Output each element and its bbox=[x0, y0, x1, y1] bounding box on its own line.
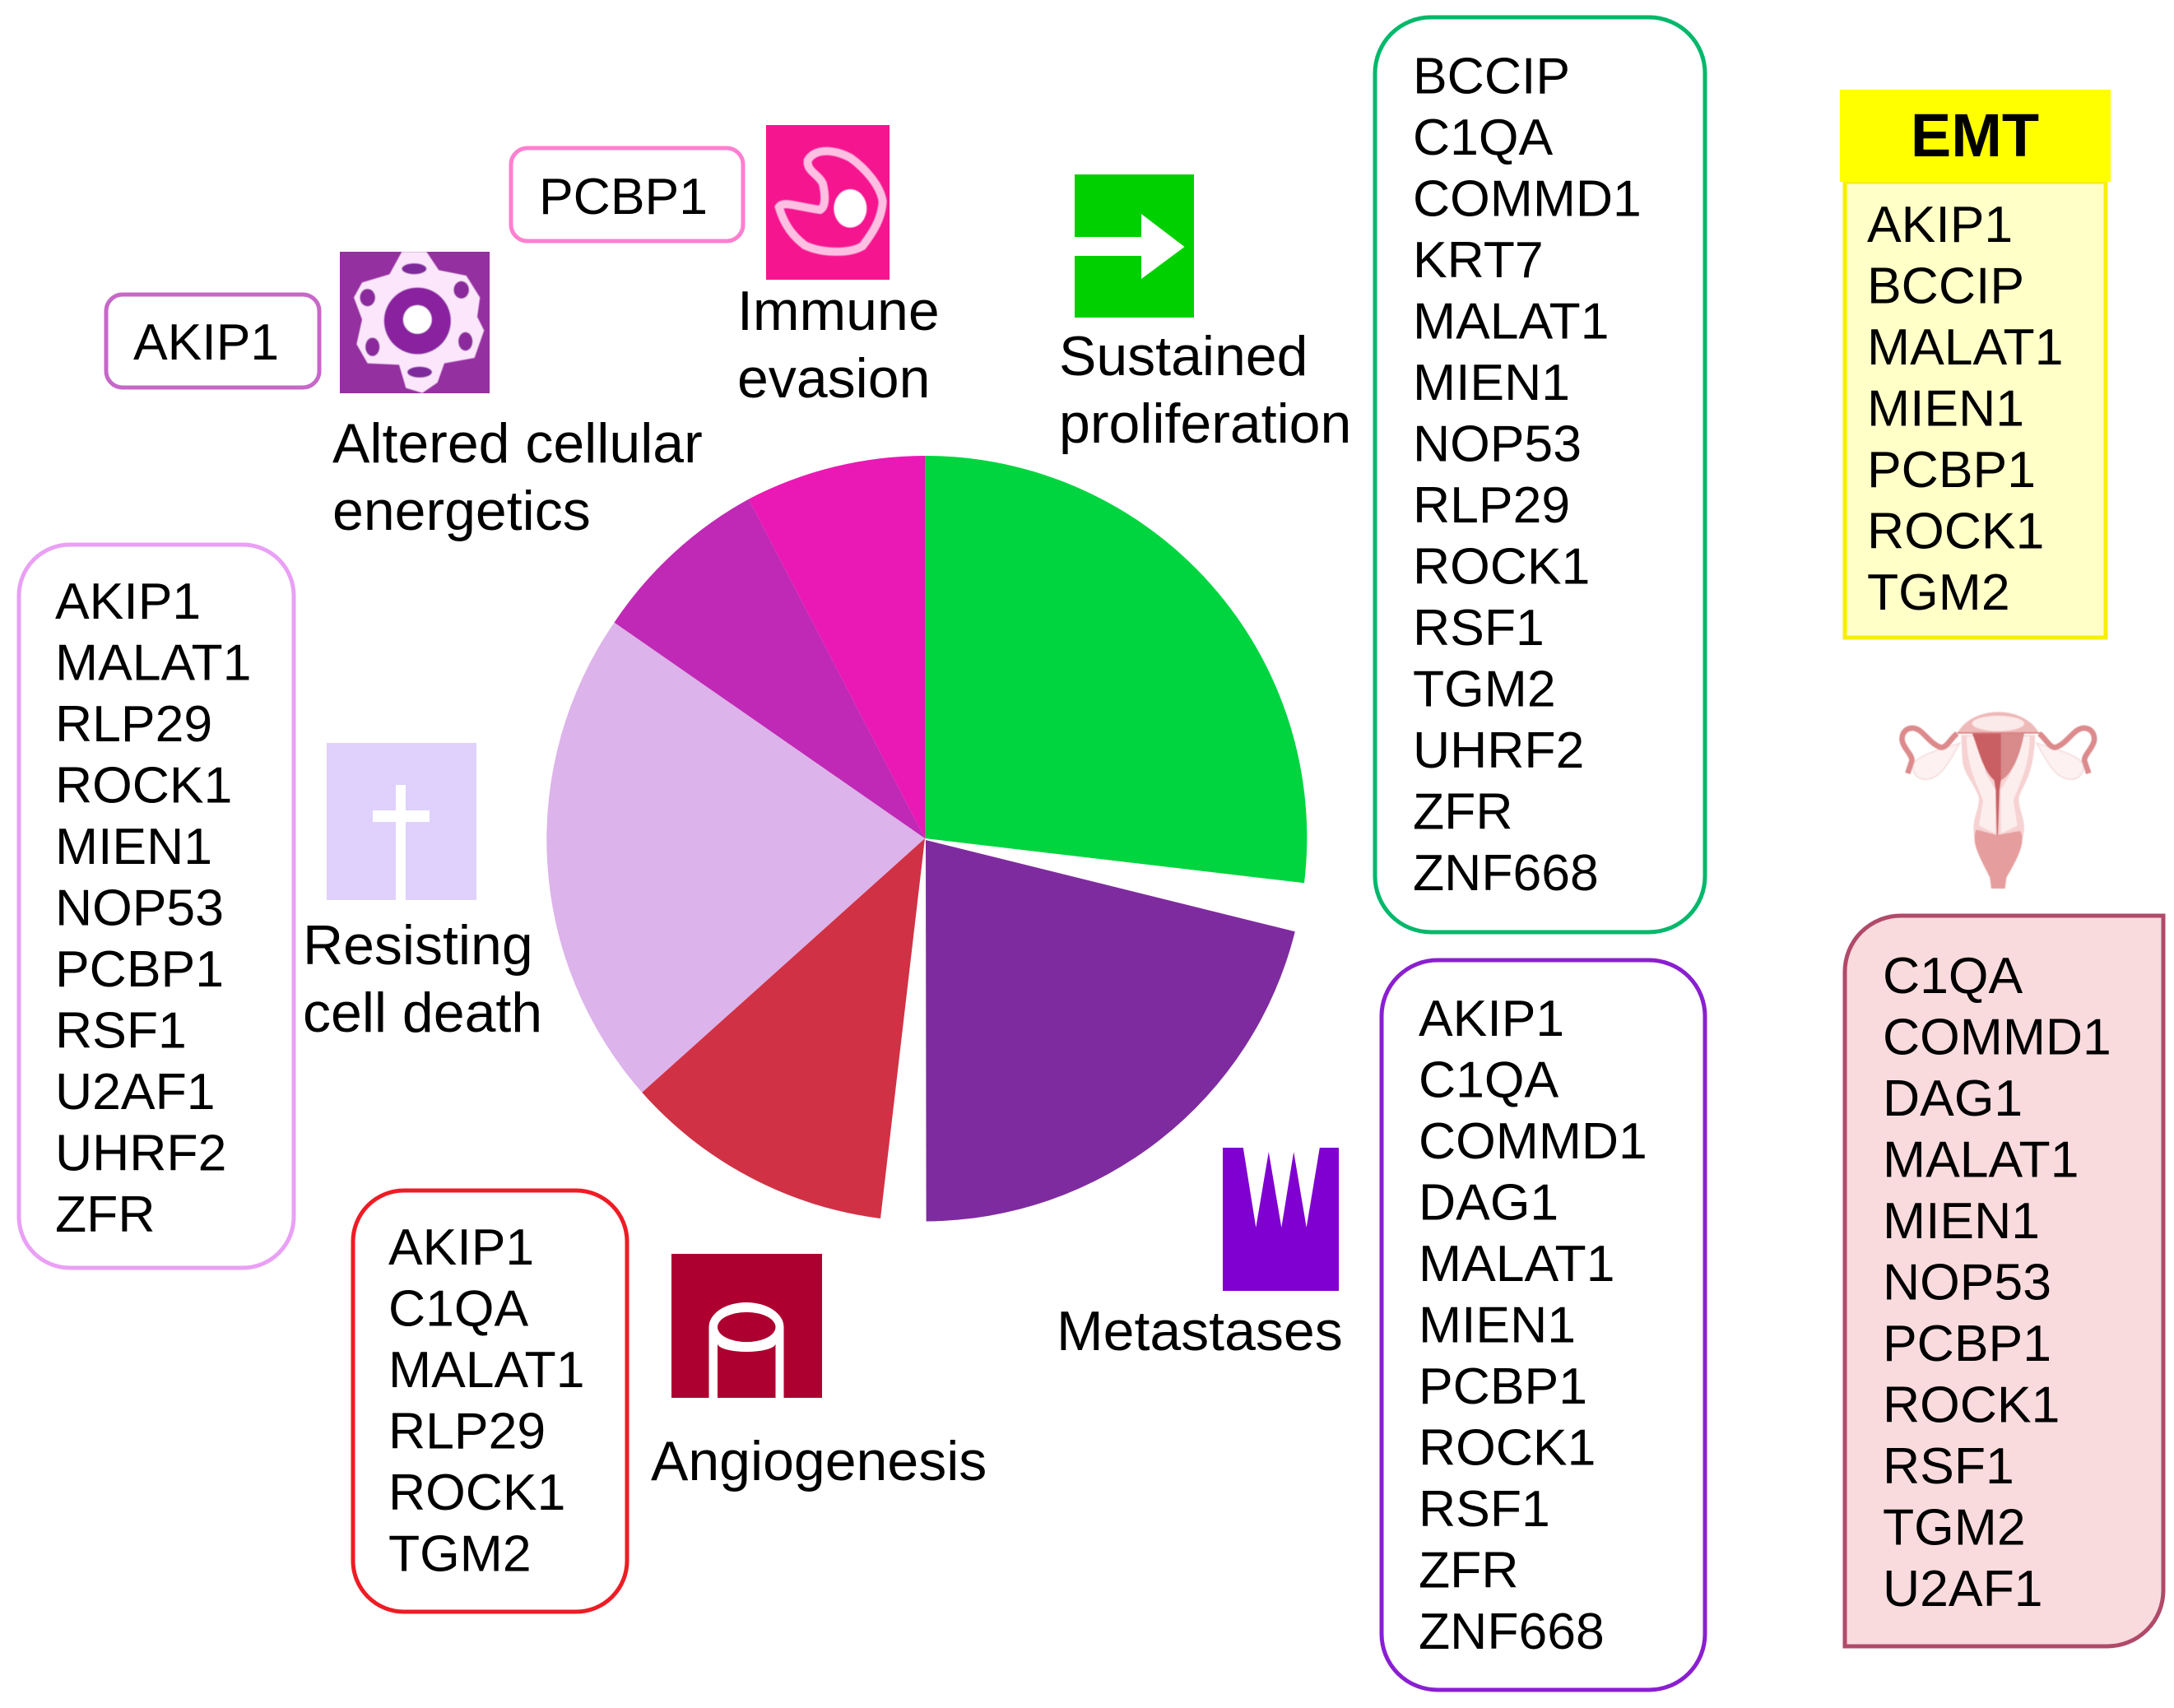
panel: cervical/uterine genes: COMMD1 bbox=[1883, 1009, 2111, 1066]
pie slice: angiogenesis bbox=[642, 838, 925, 1218]
EMT header band bbox=[1840, 90, 2111, 182]
panel: resisting cell death genes: NOP53 bbox=[55, 879, 224, 936]
pie slice: sustained proliferation bbox=[925, 456, 1307, 883]
icon: uterus bbox=[1902, 712, 2094, 889]
label: metastases: Metastases bbox=[1057, 1300, 1343, 1362]
panel: metastases genes: C1QA bbox=[1419, 1051, 1559, 1109]
label: altered cellular energetics: energetics bbox=[332, 480, 591, 542]
panel: resisting cell death genes bbox=[19, 545, 294, 1268]
label: resisting cell death: Resisting bbox=[303, 914, 533, 977]
panel: sustained proliferation genes bbox=[1375, 17, 1705, 932]
panel: metastases genes: ROCK1 bbox=[1419, 1418, 1596, 1476]
dome highlight bbox=[1972, 716, 2024, 731]
panel: resisting cell death genes: RSF1 bbox=[55, 1002, 187, 1060]
pie slice: immune evasion bbox=[749, 456, 925, 838]
label: altered cellular energetics: Altered cellular bbox=[332, 412, 703, 475]
panel: angiogenesis genes: C1QA bbox=[388, 1280, 529, 1338]
panel: sustained proliferation genes: RSF1 bbox=[1413, 599, 1545, 657]
label: sustained proliferation: Sustained bbox=[1059, 325, 1308, 388]
panel: resisting cell death genes: PCBP1 bbox=[55, 940, 224, 998]
fallopian tubes bbox=[1902, 728, 1957, 773]
panel: sustained proliferation genes: TGM2 bbox=[1413, 660, 1556, 717]
panel: sustained proliferation genes: RLP29 bbox=[1413, 476, 1570, 534]
EMT gene list: MIEN1 bbox=[1867, 380, 2024, 438]
EMT gene list: TGM2 bbox=[1867, 564, 2010, 621]
EMT gene list: MALAT1 bbox=[1867, 318, 2064, 376]
icon: altered cellular energetics atom bbox=[340, 252, 490, 393]
panel: cervical/uterine genes: PCBP1 bbox=[1883, 1315, 2051, 1372]
panel: angiogenesis genes bbox=[353, 1190, 627, 1612]
panel: sustained proliferation genes: NOP53 bbox=[1413, 415, 1582, 472]
panel: metastases genes: ZNF668 bbox=[1419, 1603, 1605, 1660]
uterine cavity bbox=[1972, 733, 2024, 837]
panel: angiogenesis genes: ROCK1 bbox=[388, 1464, 565, 1521]
icon: angiogenesis vessel bbox=[671, 1254, 822, 1398]
panel: cervical/uterine genes: TGM2 bbox=[1883, 1499, 2026, 1557]
panel: energetics gene AKIP1: AKIP1 bbox=[133, 313, 279, 371]
panel: angiogenesis genes: TGM2 bbox=[388, 1525, 532, 1583]
panel: resisting cell death genes: AKIP1 bbox=[55, 573, 201, 630]
EMT gene list: BCCIP bbox=[1867, 257, 2024, 314]
panel: resisting cell death genes: MALAT1 bbox=[55, 634, 252, 691]
panel: cervical/uterine genes: MIEN1 bbox=[1883, 1192, 2040, 1250]
panel: metastases genes: DAG1 bbox=[1419, 1173, 1558, 1231]
EMT gene list: PCBP1 bbox=[1867, 441, 2036, 499]
panel: sustained proliferation genes: C1QA bbox=[1413, 109, 1554, 166]
icon: immune evasion bbox=[766, 125, 890, 280]
panel: sustained proliferation genes: ZFR bbox=[1413, 783, 1512, 841]
panel: resisting cell death genes: ROCK1 bbox=[55, 757, 232, 815]
panel: immune evasion gene PCBP1 bbox=[511, 148, 743, 241]
panel: cervical/uterine genes bbox=[1845, 916, 2163, 1646]
panel: resisting cell death genes: U2AF1 bbox=[55, 1063, 216, 1121]
panel: metastases genes: RSF1 bbox=[1419, 1480, 1550, 1538]
label: immune evasion: Immune bbox=[737, 280, 940, 342]
pie chart bbox=[546, 456, 1307, 1221]
panel: EMT genes bbox=[1840, 90, 2111, 638]
panel: metastases genes: COMMD1 bbox=[1419, 1112, 1647, 1170]
icon: sustained proliferation arrow bbox=[1075, 174, 1194, 318]
panel: sustained proliferation genes: ROCK1 bbox=[1413, 538, 1590, 596]
panel: cervical/uterine genes: MALAT1 bbox=[1883, 1130, 2079, 1188]
pie slice: altered cellular energetics bbox=[614, 499, 925, 838]
EMT heading: EMT bbox=[1911, 101, 2039, 169]
panel: resisting cell death genes: MIEN1 bbox=[55, 818, 212, 875]
panel: resisting cell death genes: ZFR bbox=[55, 1186, 155, 1243]
panel: angiogenesis genes: RLP29 bbox=[388, 1402, 546, 1460]
ovaries bbox=[1913, 743, 2083, 779]
panel: sustained proliferation genes: BCCIP bbox=[1413, 48, 1570, 105]
uterus body bbox=[1961, 735, 2035, 889]
panel: sustained proliferation genes: KRT7 bbox=[1413, 231, 1544, 289]
label: angiogenesis: Angiogenesis bbox=[651, 1430, 987, 1492]
panel: resisting cell death genes: RLP29 bbox=[55, 695, 212, 753]
vaginal canal bbox=[1975, 829, 2023, 889]
panel: cervical/uterine genes: DAG1 bbox=[1883, 1070, 2023, 1127]
panel: metastases genes: AKIP1 bbox=[1419, 990, 1564, 1047]
cavity light half bbox=[2001, 733, 2024, 780]
uterine dome bbox=[1957, 712, 2039, 734]
icon: metastases bbox=[1223, 1148, 1339, 1291]
panel: cervical/uterine genes: NOP53 bbox=[1883, 1254, 2051, 1311]
panel: immune evasion gene PCBP1: PCBP1 bbox=[539, 168, 708, 225]
panel: metastases genes: MIEN1 bbox=[1419, 1297, 1576, 1354]
icon: resisting cell death cross bbox=[327, 743, 476, 900]
pie slice: resisting cell death bbox=[546, 623, 925, 1093]
panel: cervical/uterine genes: ROCK1 bbox=[1883, 1376, 2060, 1433]
panel: metastases genes bbox=[1382, 960, 1705, 1690]
EMT gene list: AKIP1 bbox=[1867, 196, 2013, 253]
panel: sustained proliferation genes: ZNF668 bbox=[1413, 844, 1599, 902]
pie slice: metastases bbox=[926, 840, 1295, 1221]
EMT gene list: ROCK1 bbox=[1867, 502, 2044, 559]
panel: metastases genes: PCBP1 bbox=[1419, 1358, 1587, 1415]
panel: cervical/uterine genes: U2AF1 bbox=[1883, 1560, 2043, 1617]
panel: cervical/uterine genes: C1QA bbox=[1883, 947, 2023, 1005]
panel: angiogenesis genes: AKIP1 bbox=[388, 1218, 534, 1276]
dome base line bbox=[1957, 732, 2041, 734]
panel: sustained proliferation genes: UHRF2 bbox=[1413, 722, 1584, 779]
panel: metastases genes: ZFR bbox=[1419, 1542, 1519, 1599]
panel: sustained proliferation genes: COMMD1 bbox=[1413, 169, 1642, 227]
panel: angiogenesis genes: MALAT1 bbox=[388, 1341, 584, 1399]
panel: sustained proliferation genes: MIEN1 bbox=[1413, 354, 1570, 411]
panel: resisting cell death genes: UHRF2 bbox=[55, 1124, 226, 1181]
label: sustained proliferation: proliferation bbox=[1059, 392, 1351, 455]
label: immune evasion: evasion bbox=[737, 347, 930, 410]
EMT list box bbox=[1845, 182, 2106, 638]
panel: sustained proliferation genes: MALAT1 bbox=[1413, 293, 1610, 350]
panel: metastases genes: MALAT1 bbox=[1419, 1235, 1614, 1293]
panel: cervical/uterine genes: RSF1 bbox=[1883, 1437, 2014, 1495]
label: resisting cell death: cell death bbox=[303, 982, 542, 1044]
uterine wall highlights bbox=[1967, 736, 2030, 833]
panel: energetics gene AKIP1 bbox=[106, 295, 319, 388]
